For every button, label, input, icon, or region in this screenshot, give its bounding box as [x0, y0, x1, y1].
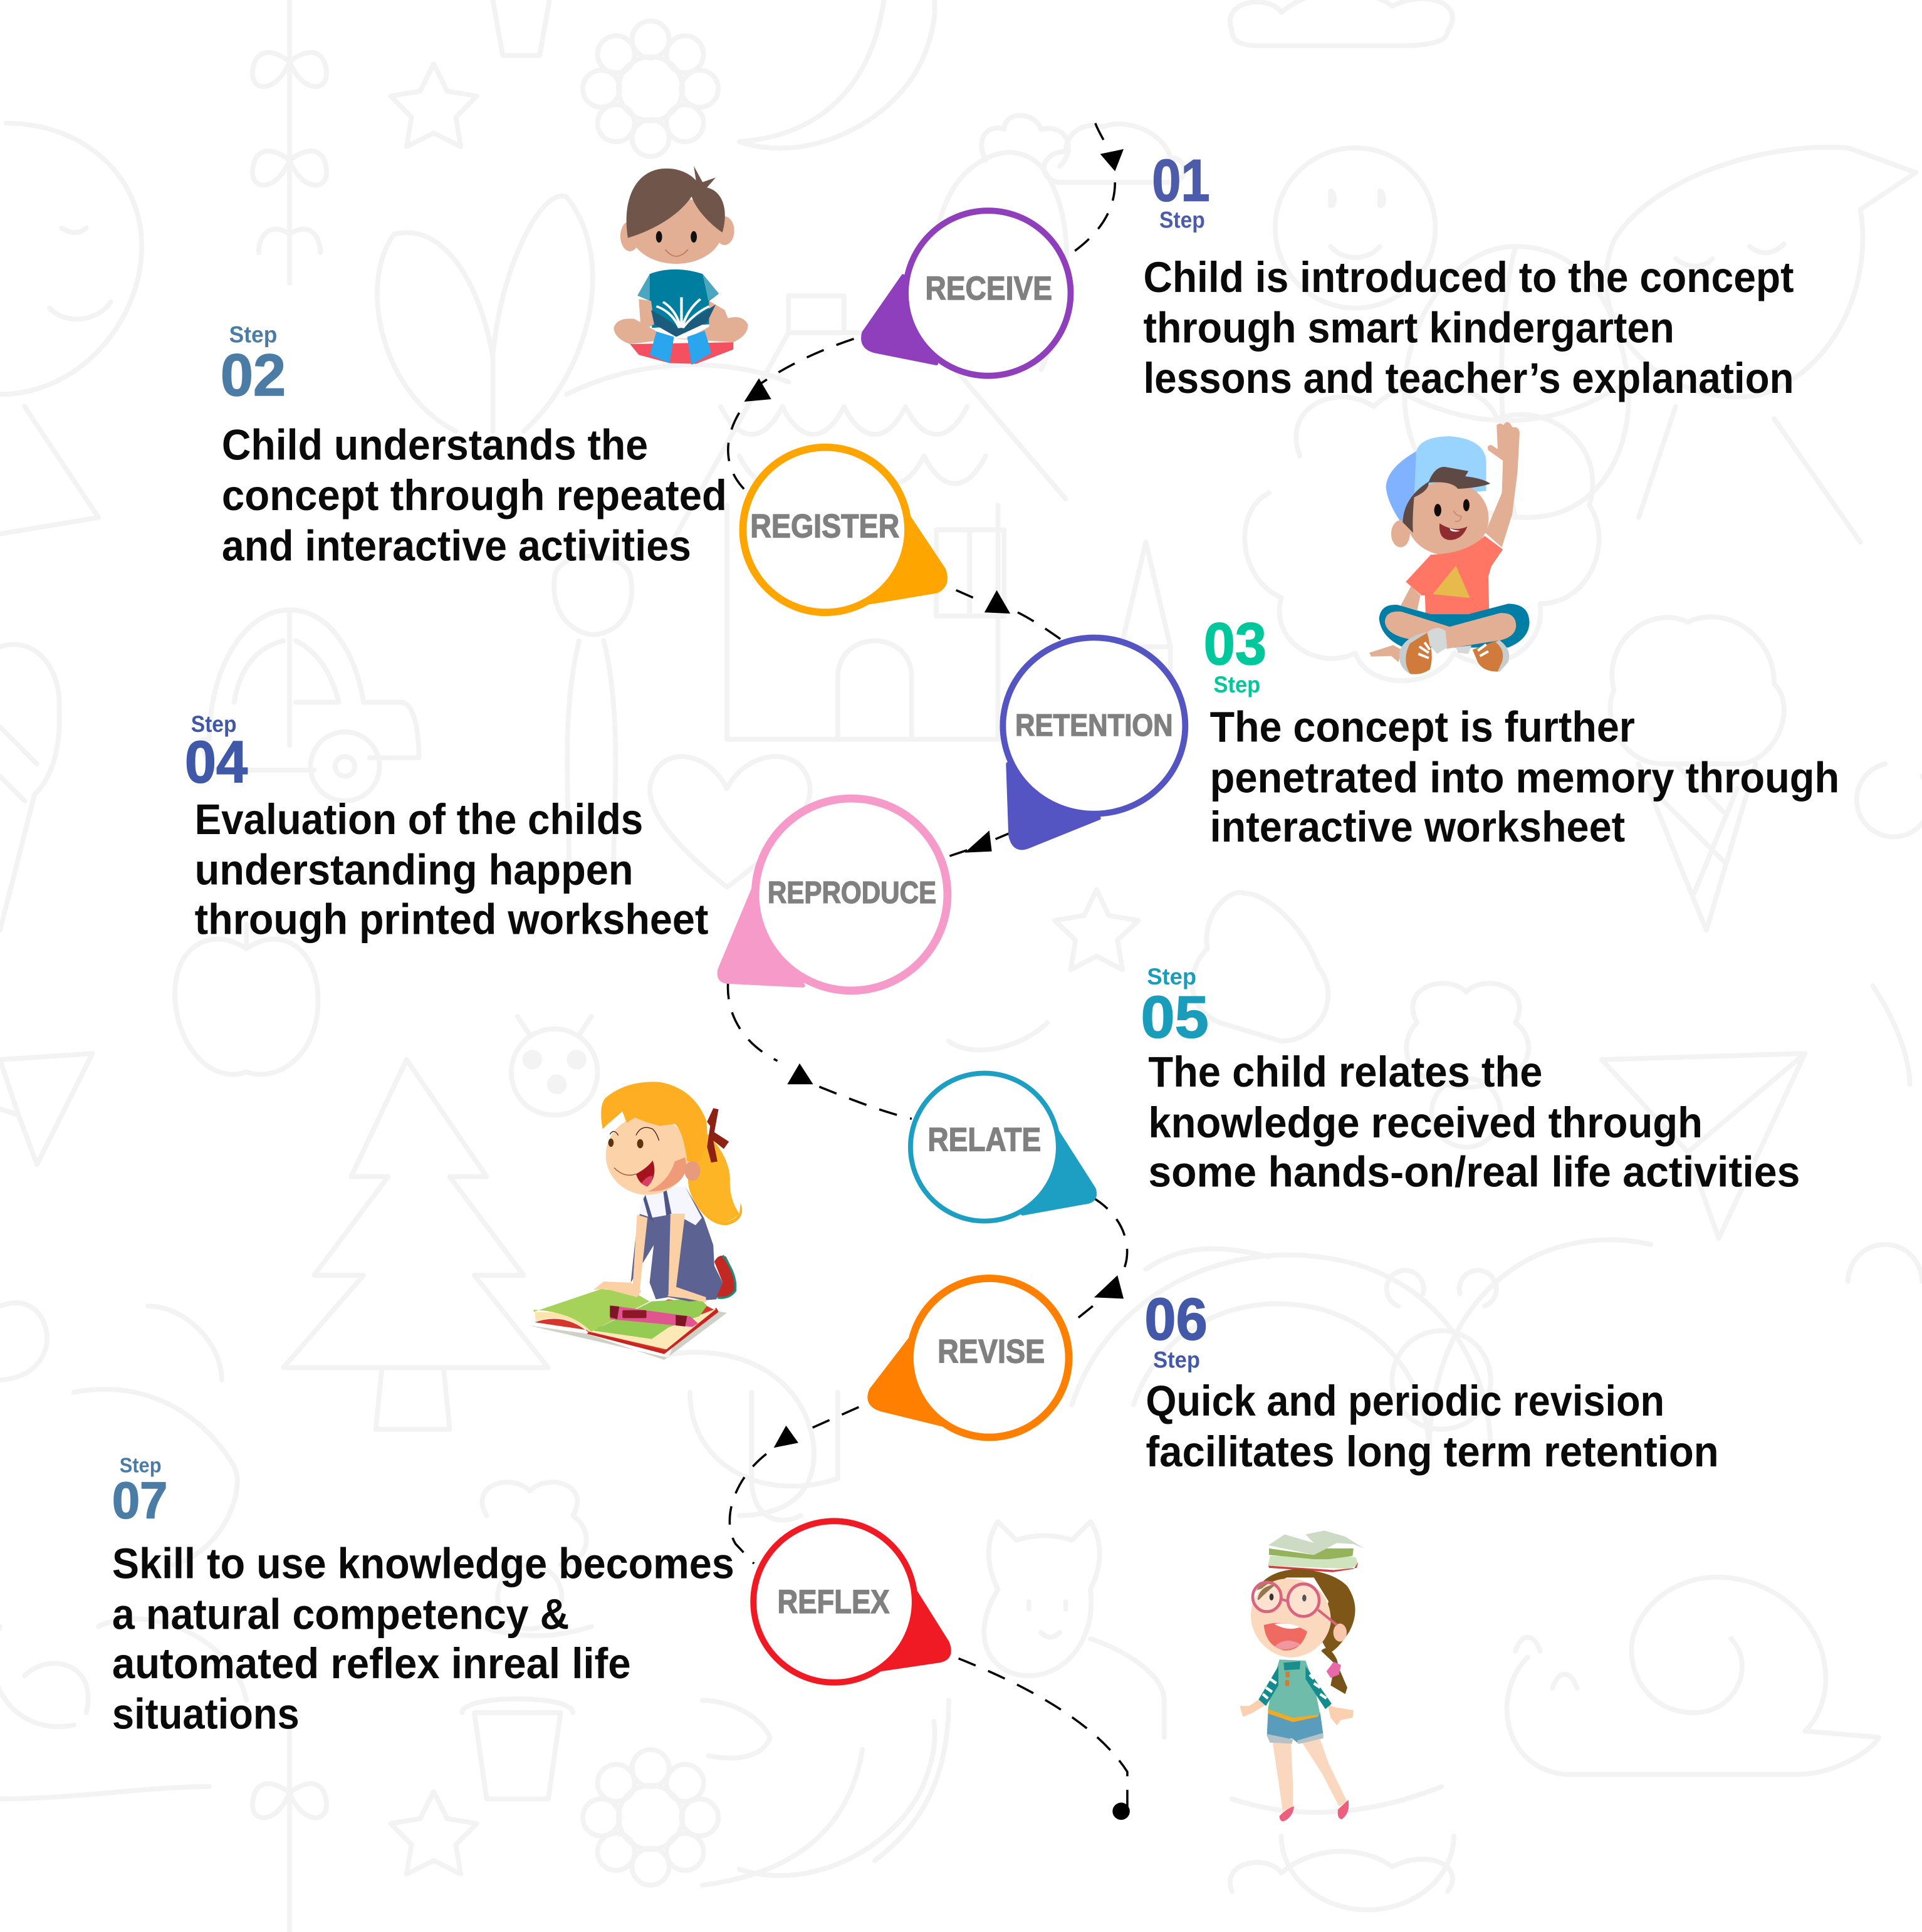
step 03 text: interactive worksheet [1210, 803, 1625, 851]
node: REFLEX: REFLEX [778, 1584, 889, 1621]
step 01 text: lessons and teacher’s explanation [1143, 354, 1794, 402]
step 05 text [1141, 963, 1800, 1196]
step 07 text: situations [112, 1690, 300, 1738]
node: REFLEX [753, 1521, 949, 1683]
step 04 text: 04 [185, 729, 248, 795]
step 05 text: Step [1147, 963, 1196, 989]
illustration: girl with open book and crayon [528, 1082, 742, 1360]
step 04 text: Evaluation of the childs [195, 795, 643, 843]
step 07 text: 07 [112, 1471, 167, 1529]
node: REGISTER [743, 447, 946, 612]
step 02 text: 02 [221, 342, 286, 408]
step 01 text: through smart kindergarten [1143, 304, 1674, 352]
node: REVISE: REVISE [937, 1334, 1045, 1371]
step 03 text: The concept is further [1210, 703, 1635, 751]
step 06 text: 06 [1144, 1286, 1208, 1352]
step 04 text: understanding happen [195, 846, 634, 894]
step 01 text: Step [1159, 207, 1205, 233]
step 04 text: Step [191, 711, 236, 737]
step 05 text: some hands-on/real life activities [1148, 1147, 1800, 1196]
node: RELATE [911, 1073, 1095, 1221]
node: RECEIVE: RECEIVE [925, 270, 1052, 307]
step 06 text: Step [1153, 1346, 1200, 1372]
node: RELATE: RELATE [927, 1121, 1041, 1158]
path end dot [1112, 1803, 1130, 1820]
step 06 text: Quick and periodic revision [1146, 1377, 1664, 1425]
step 02 text: Step [229, 321, 277, 348]
step 05 text: knowledge received through [1148, 1099, 1703, 1147]
node: REPRODUCE [719, 798, 948, 991]
step 04 text [185, 711, 709, 943]
step 03 text: Step [1214, 671, 1260, 697]
step 05 text: 05 [1141, 984, 1209, 1050]
step 06 text: facilitates long term retention [1146, 1428, 1719, 1476]
illustration: boy raising hand [1369, 422, 1530, 675]
step 02 text: Child understands the [222, 420, 648, 469]
node: RETENTION [1003, 638, 1185, 848]
step 02 text: and interactive activities [222, 522, 691, 570]
step 05 text: The child relates the [1148, 1048, 1542, 1096]
node: REVISE [869, 1278, 1069, 1438]
step 03 text: penetrated into memory through [1210, 753, 1839, 802]
node: RECEIVE [863, 211, 1070, 376]
step 04 text: through printed worksheet [195, 895, 709, 943]
arrowheads [744, 149, 1124, 1448]
node: REPRODUCE: REPRODUCE [768, 876, 936, 910]
step 07 text: Skill to use knowledge becomes [112, 1540, 734, 1588]
step 02 text [221, 321, 727, 570]
step 01 text: Child is introduced to the concept [1143, 253, 1794, 301]
step 07 text: automated reflex inreal life [112, 1639, 631, 1688]
step 01 text [1143, 147, 1794, 402]
node: RETENTION: RETENTION [1015, 709, 1173, 743]
step 03 text: 03 [1204, 611, 1267, 677]
step 07 text: a natural competency & [112, 1590, 569, 1638]
illustration: girl with books on head [1240, 1530, 1364, 1821]
step 03 text [1204, 611, 1839, 851]
dashed learning path [728, 123, 1127, 1809]
node: REGISTER: REGISTER [750, 508, 899, 545]
step 02 text: concept through repeated [222, 471, 727, 520]
step 01 text: 01 [1152, 147, 1210, 213]
illustration: boy reading a book [614, 166, 748, 365]
step 07 text: Step [120, 1454, 162, 1478]
step 06 text [1144, 1286, 1719, 1476]
step 07 text [112, 1454, 734, 1738]
